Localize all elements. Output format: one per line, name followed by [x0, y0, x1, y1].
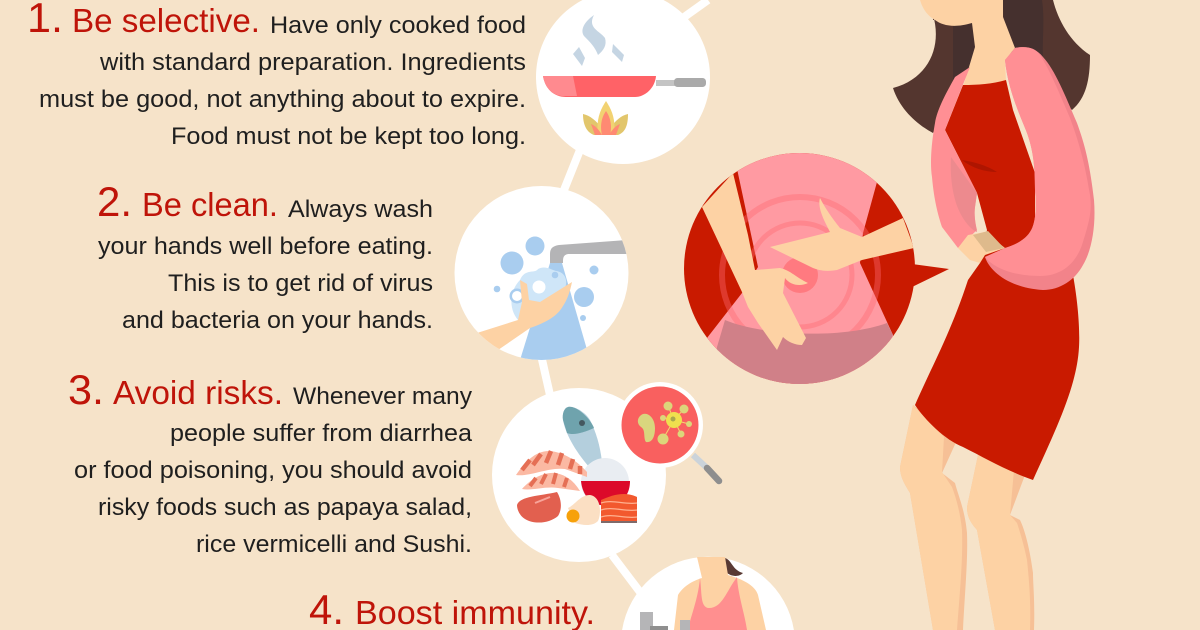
- circle: exercising woman: [622, 557, 794, 630]
- icon: dumbbells: [640, 612, 690, 630]
- callout pointer: [912, 264, 949, 287]
- icon: meat: [517, 492, 561, 523]
- callout: stomach pain: [684, 150, 949, 400]
- belly: [707, 153, 893, 384]
- icon: legs: [900, 405, 1034, 630]
- tip 3 text: risky foods such as papaya salad,: [98, 494, 472, 521]
- tip 3 text: or food poisoning, you should avoid: [74, 457, 472, 484]
- icon: shrimp sushi: [516, 451, 587, 491]
- tip 1 text: [27, 0, 526, 150]
- tip 2 text: your hands well before eating.: [98, 233, 433, 260]
- tip 1 text: with standard preparation. Ingredients: [99, 49, 526, 76]
- tip 3 text: Whenever many: [293, 383, 472, 410]
- icon: dress crease: [962, 160, 997, 172]
- circle: hand washing: [454, 186, 640, 360]
- icon: salmon: [601, 494, 637, 523]
- tip 1 text: Have only cooked food: [270, 12, 526, 39]
- tip 3 text: 3.: [68, 366, 104, 413]
- icon: hair shading: [953, 0, 1043, 100]
- tip 1 text: must be good, not anything about to expire.: [39, 86, 526, 113]
- icon: clasped hands: [958, 231, 1005, 263]
- tip 3 text: people suffer from diarrhea: [170, 420, 473, 447]
- icon: neck: [920, 0, 1015, 87]
- icon: skin: [674, 557, 766, 630]
- pain rings: [722, 197, 878, 353]
- tip 4 heading: Boost immunity.: [355, 594, 595, 630]
- icon: left sleeve: [931, 67, 977, 248]
- icon: frying pan: [543, 76, 706, 97]
- icon: soap bubbles: [494, 236, 598, 321]
- icon: right sleeve: [985, 47, 1095, 290]
- circle: cooking: [536, 0, 710, 164]
- icon: flame: [583, 101, 628, 135]
- woman figure: [893, 0, 1095, 630]
- icon: rice bowl: [581, 458, 630, 506]
- tip 2 text: [97, 178, 433, 334]
- tip 2 text: Always wash: [288, 196, 433, 223]
- icon: bacteria: [638, 402, 692, 444]
- tip 3 text: Avoid risks.: [113, 374, 283, 411]
- right hand: [770, 198, 914, 271]
- left hand: [702, 173, 808, 350]
- icon: tank top: [688, 577, 747, 630]
- tip 3 text: rice vermicelli and Sushi.: [196, 531, 472, 558]
- tip 2 text: 2.: [97, 178, 132, 225]
- tip 1 text: Be selective.: [72, 2, 260, 39]
- icon: red dress: [915, 80, 1079, 480]
- icon: magnifying glass with germs: [617, 382, 719, 481]
- tip 2 text: Be clean.: [142, 186, 278, 223]
- tip 4 heading: [309, 586, 595, 630]
- icon: water stream: [520, 263, 590, 360]
- icon: faucet: [550, 240, 626, 263]
- icon: hair: [725, 558, 743, 576]
- icon: fish: [563, 407, 602, 468]
- icon: egg: [566, 495, 600, 525]
- icon: foam: [511, 267, 566, 320]
- icon: hair: [893, 0, 1090, 133]
- connector lines: [541, 0, 708, 592]
- tip 2 text: This is to get rid of virus: [168, 270, 433, 297]
- icon: hand: [477, 280, 572, 350]
- circle: risky foods: [492, 388, 666, 562]
- tip 2 text: and bacteria on your hands.: [122, 307, 433, 334]
- tip 1 text: Food must not be kept too long.: [171, 123, 526, 150]
- tip 3 text: [68, 366, 473, 558]
- icon: steam: [573, 15, 624, 66]
